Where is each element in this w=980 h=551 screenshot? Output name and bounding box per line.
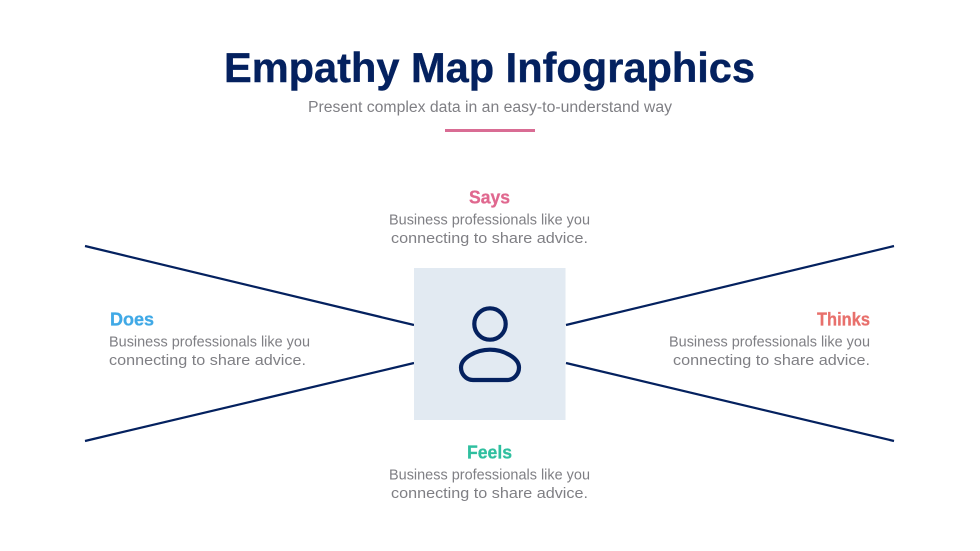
icon: person	[461, 308, 519, 380]
title accent bar	[445, 129, 535, 132]
heading: does: Does	[110, 308, 154, 330]
heading: feels: Feels	[467, 442, 512, 462]
text: thinks description: Business professionals like you	[669, 334, 870, 350]
subtitle: Present complex data in an easy-to-understand way	[308, 99, 672, 116]
text: feels description: connecting to share advice.	[391, 486, 588, 502]
center panel	[414, 268, 566, 420]
panel: feels	[389, 442, 590, 502]
heading: thinks: Thinks	[817, 308, 870, 330]
connector line: top left	[85, 246, 414, 325]
text: thinks description: connecting to share advice.	[673, 353, 870, 369]
connector line: bottom left	[85, 363, 414, 441]
text: says description: connecting to share advice.	[391, 231, 588, 247]
panel: does	[109, 308, 310, 369]
text: does description: Business professionals like you	[109, 334, 310, 350]
heading: says: Says	[469, 186, 510, 208]
connector line: bottom right	[566, 363, 894, 441]
text: says description: Business professionals like you	[389, 212, 590, 228]
panel: thinks	[669, 308, 870, 369]
text: does description: connecting to share advice.	[109, 353, 306, 369]
text: feels description: Business professionals like you	[389, 468, 590, 484]
panel: says	[389, 186, 590, 247]
connector line: top right	[566, 246, 894, 325]
title: Empathy Map Infographics	[224, 44, 755, 91]
